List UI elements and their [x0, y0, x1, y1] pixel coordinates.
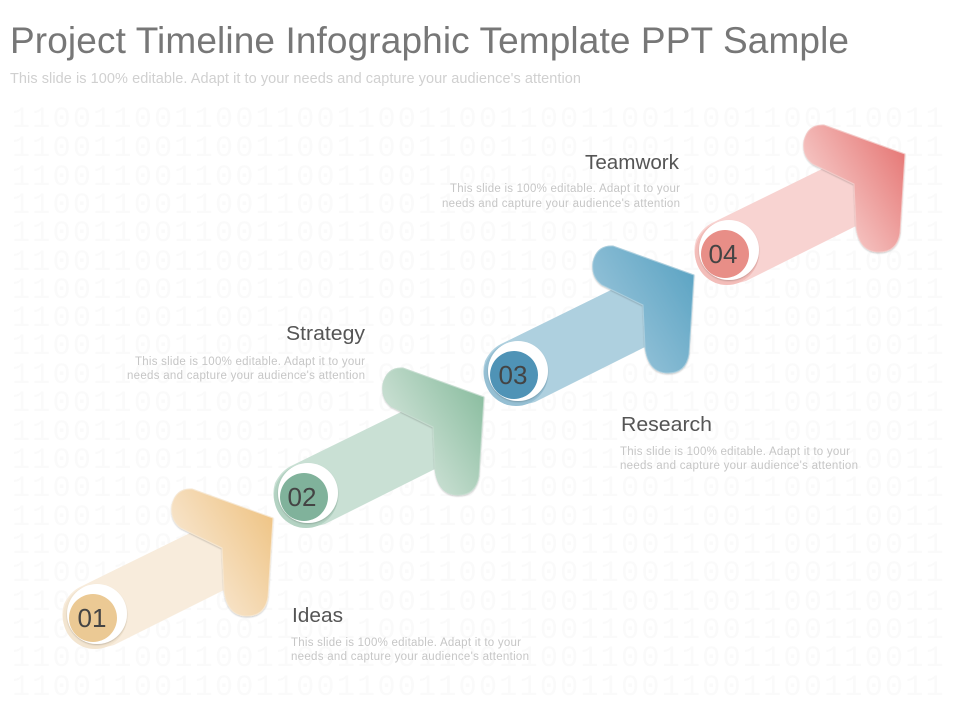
text block: Ideas: Ideas — [292, 605, 343, 627]
background binary pattern: 1100110011001100110011001100110011001100110011 — [12, 359, 946, 393]
text block: Strategy: needs and capture your audience's attention — [127, 370, 365, 382]
text block: Research: Research — [621, 414, 712, 436]
number badge 04 — [695, 220, 759, 285]
background binary pattern: 1100110011001100110011001100110011001100110011 — [12, 330, 946, 364]
number badge 03 — [484, 341, 548, 406]
arrow head 01 — [172, 489, 273, 616]
arrow head 04 — [804, 125, 905, 252]
text block: Ideas: needs and capture your audience's attention — [291, 651, 529, 663]
text block: Research: This slide is 100% editable. Adapt it to your — [620, 446, 850, 458]
number badge 03: 03 — [499, 360, 527, 390]
background binary pattern: 1100110011001100110011001100110011001100110011 — [12, 302, 946, 336]
number badge 04: 04 — [709, 239, 737, 269]
background binary pattern: 1100110011001100110011001100110011001100110011 — [12, 103, 946, 137]
background binary pattern: 1100110011001100110011001100110011001100110011 — [12, 246, 946, 280]
background binary pattern: 1100110011001100110011001100110011001100110011 — [12, 416, 946, 450]
arrow 01 — [62, 489, 273, 649]
text block: Teamwork: This slide is 100% editable. Adapt it to your — [450, 183, 680, 195]
text block: Teamwork: Teamwork — [585, 152, 680, 174]
text block: Ideas — [291, 605, 529, 663]
number badge 02: 02 — [288, 482, 316, 512]
shaft 03 — [483, 290, 645, 405]
background binary pattern: 1100110011001100110011001100110011001100110011 — [12, 614, 946, 648]
background binary pattern: 1100110011001100110011001100110011001100110011 — [12, 444, 946, 478]
arrow head 02 — [383, 368, 484, 495]
text block: Strategy — [127, 323, 365, 382]
subtitle: This slide is 100% editable. Adapt it to your needs and capture your audience's attention — [10, 71, 581, 87]
background binary pattern: 1100110011001100110011001100110011001100110011 — [12, 132, 946, 166]
background binary pattern: 1100110011001100110011001100110011001100110011 — [12, 529, 946, 563]
background binary pattern: 1100110011001100110011001100110011001100110011 — [12, 642, 946, 676]
arrow 02 — [273, 368, 484, 528]
background binary pattern: 1100110011001100110011001100110011001100110011 — [12, 501, 946, 535]
text block: Strategy: This slide is 100% editable. Adapt it to your — [135, 356, 365, 368]
arrow 04 — [694, 125, 905, 285]
number badge 02 — [274, 463, 338, 528]
number badge 01 — [63, 584, 127, 649]
text block: Teamwork: needs and capture your audience's attention — [442, 198, 680, 210]
background binary pattern: 1100110011001100110011001100110011001100110011 — [12, 189, 946, 223]
text block: Research — [620, 414, 858, 472]
arrow 03 — [483, 246, 694, 406]
text block: Strategy: Strategy — [286, 323, 365, 345]
arrow head 03 — [593, 246, 694, 373]
background binary pattern: 1100110011001100110011001100110011001100110011 — [12, 671, 946, 705]
title: Project Timeline Infographic Template PPT Sample — [10, 20, 849, 61]
background binary pattern: 1100110011001100110011001100110011001100110011 — [12, 161, 946, 195]
shaft 02 — [273, 412, 435, 527]
background binary pattern: 1100110011001100110011001100110011001100110011 — [12, 586, 946, 620]
text block: Research: needs and capture your audience's attention — [620, 460, 858, 472]
background binary pattern: 1100110011001100110011001100110011001100110011 — [12, 274, 946, 308]
background binary pattern: 1100110011001100110011001100110011001100110011 — [12, 387, 946, 421]
text block: Ideas: This slide is 100% editable. Adapt it to your — [291, 637, 521, 649]
background binary pattern: 1100110011001100110011001100110011001100110011 — [12, 472, 946, 506]
number badge 01: 01 — [78, 603, 106, 633]
background binary pattern: 1100110011001100110011001100110011001100110011 — [12, 217, 946, 251]
background binary pattern: 1100110011001100110011001100110011001100110011 — [12, 557, 946, 591]
text block: Teamwork — [442, 152, 680, 210]
shaft 04 — [694, 169, 856, 284]
shaft 01 — [62, 533, 224, 648]
